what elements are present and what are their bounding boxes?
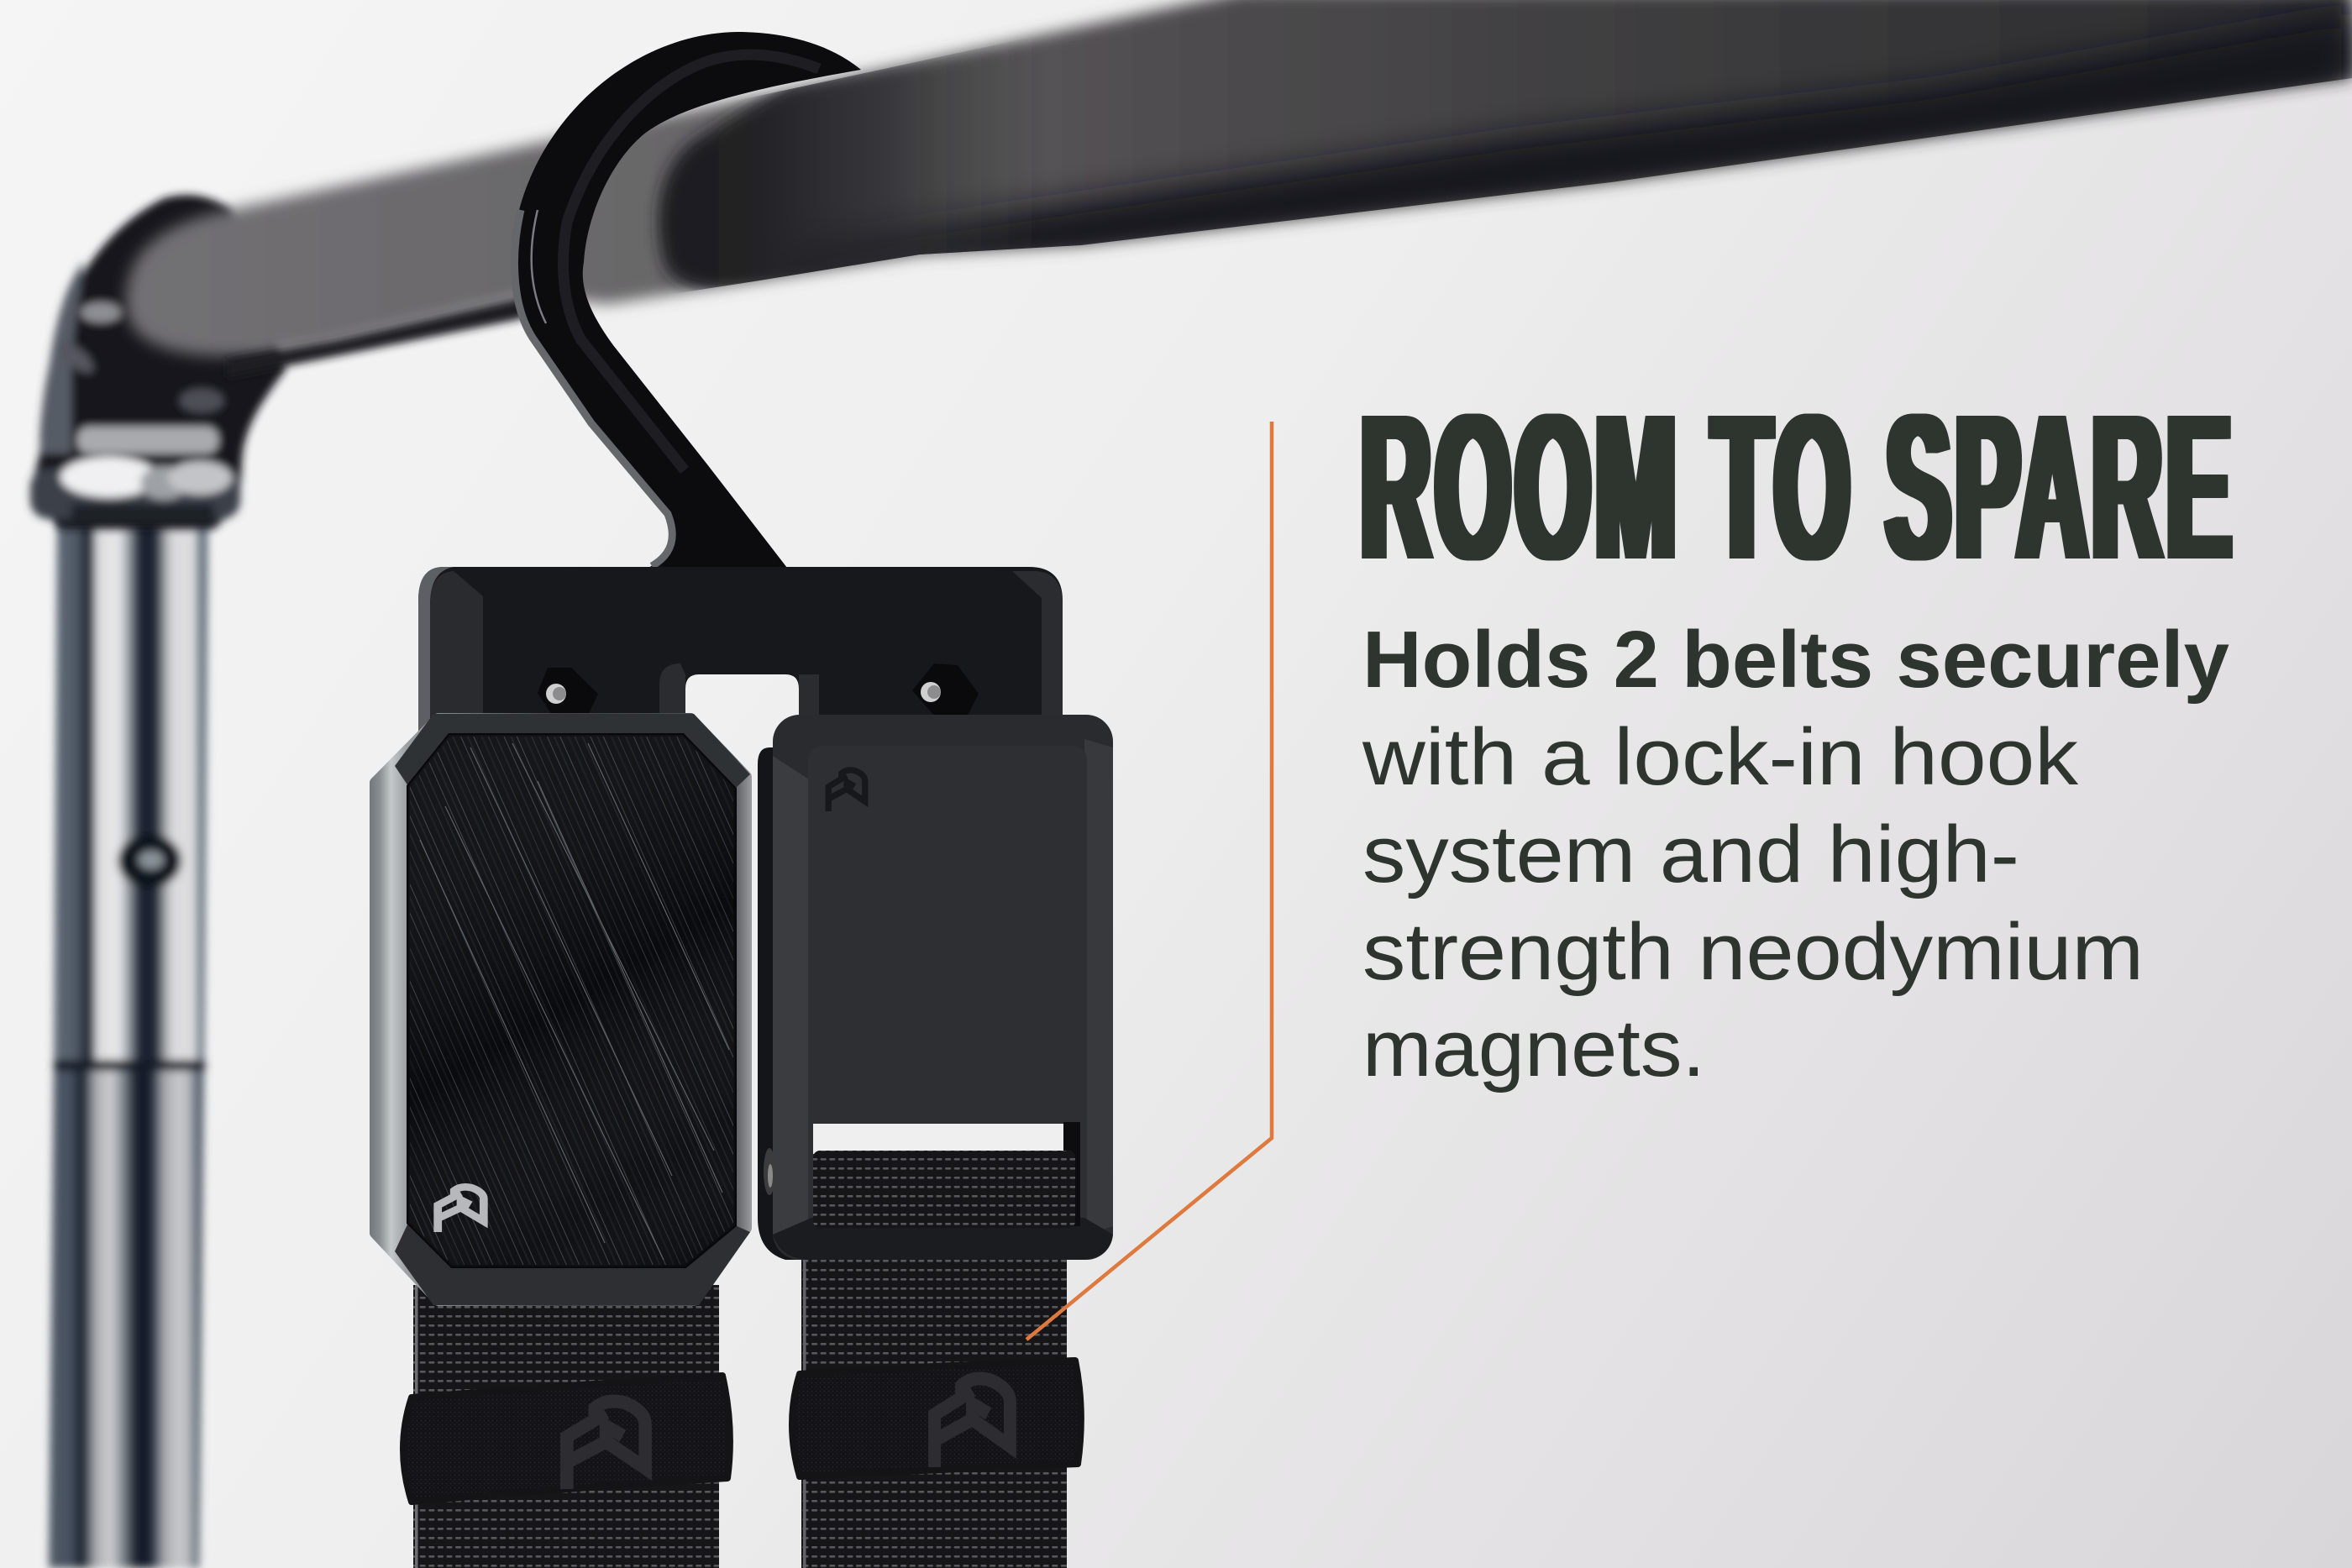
right buckle	[758, 715, 1113, 1260]
hook	[513, 32, 861, 568]
webbing through slot	[813, 1151, 1075, 1228]
orange leader line	[1026, 422, 1272, 1340]
logo on left keeper	[567, 1401, 645, 1489]
logo on left buckle	[438, 1187, 484, 1232]
logo on right keeper	[935, 1378, 1010, 1467]
right strap webbing	[801, 1251, 1067, 1568]
body line 4: magnets.	[1362, 1004, 1705, 1093]
buckle slot	[813, 1124, 1063, 1154]
blurred elbow and flange	[30, 195, 286, 529]
horizontal pipe	[126, 0, 2352, 378]
right strap keeper loop	[792, 1361, 1081, 1476]
shadow behind hook	[659, 34, 1042, 291]
bracket nut right	[912, 663, 979, 719]
side pin	[764, 1148, 775, 1195]
body line 1: with a lock-in hook	[1362, 712, 2079, 802]
body line 3: strength neodymium	[1362, 907, 2144, 997]
pipe underside shadow left	[227, 294, 554, 378]
pipe dark underside band right	[756, 13, 2352, 290]
buckle logo	[828, 770, 865, 811]
title: ROOM TO SPARE	[1361, 371, 2236, 603]
bold lead line: Holds 2 belts securely	[1362, 615, 2229, 705]
left strap keeper loop	[403, 1376, 730, 1502]
brushed metal plate	[408, 735, 735, 1266]
body line 2: system and high-	[1362, 810, 2019, 899]
body text	[1362, 615, 2229, 1093]
bracket	[418, 567, 1063, 731]
left strap webbing	[413, 1285, 719, 1568]
brighter scratches on plate	[420, 743, 729, 1260]
left buckle with brushed plate	[375, 714, 750, 1305]
bracket nut left	[538, 668, 598, 719]
blurred vertical pole	[49, 512, 208, 1568]
